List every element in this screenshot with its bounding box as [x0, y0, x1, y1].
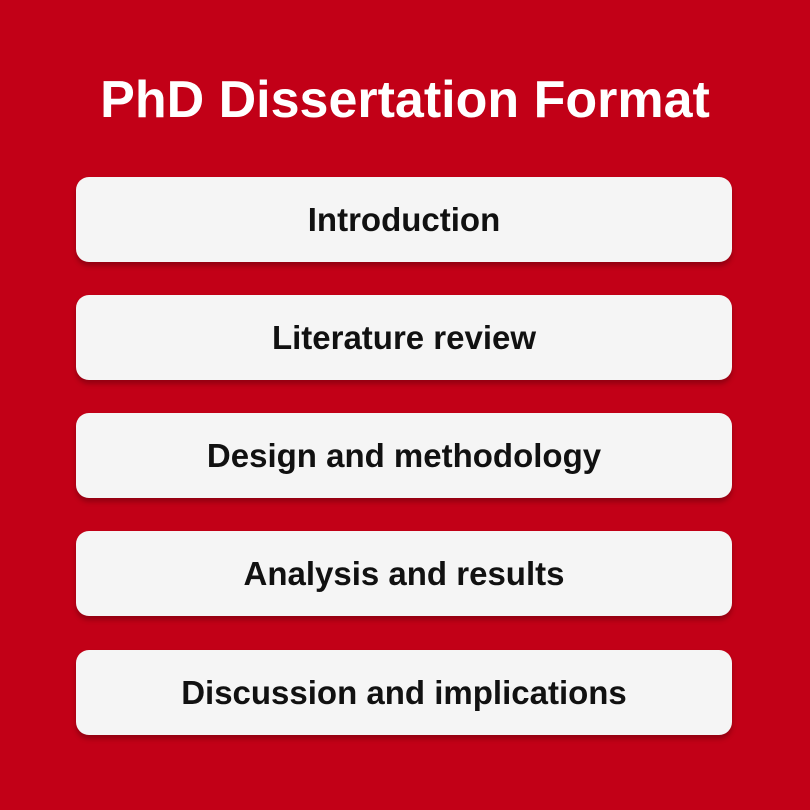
title: PhD Dissertation Format: [100, 71, 710, 129]
box: design and methodology: Design and methodology: [207, 436, 601, 474]
box: analysis and results: Analysis and results: [244, 554, 564, 592]
box: literature review: [76, 295, 732, 380]
box: design and methodology: [76, 413, 732, 498]
box: introduction: Introduction: [308, 200, 500, 238]
box: analysis and results: [76, 531, 732, 616]
box: literature review: Literature review: [272, 318, 536, 356]
box: discussion and implications: [76, 650, 732, 735]
box: discussion and implications: Discussion and implications: [181, 674, 627, 710]
box: introduction: [76, 177, 732, 262]
